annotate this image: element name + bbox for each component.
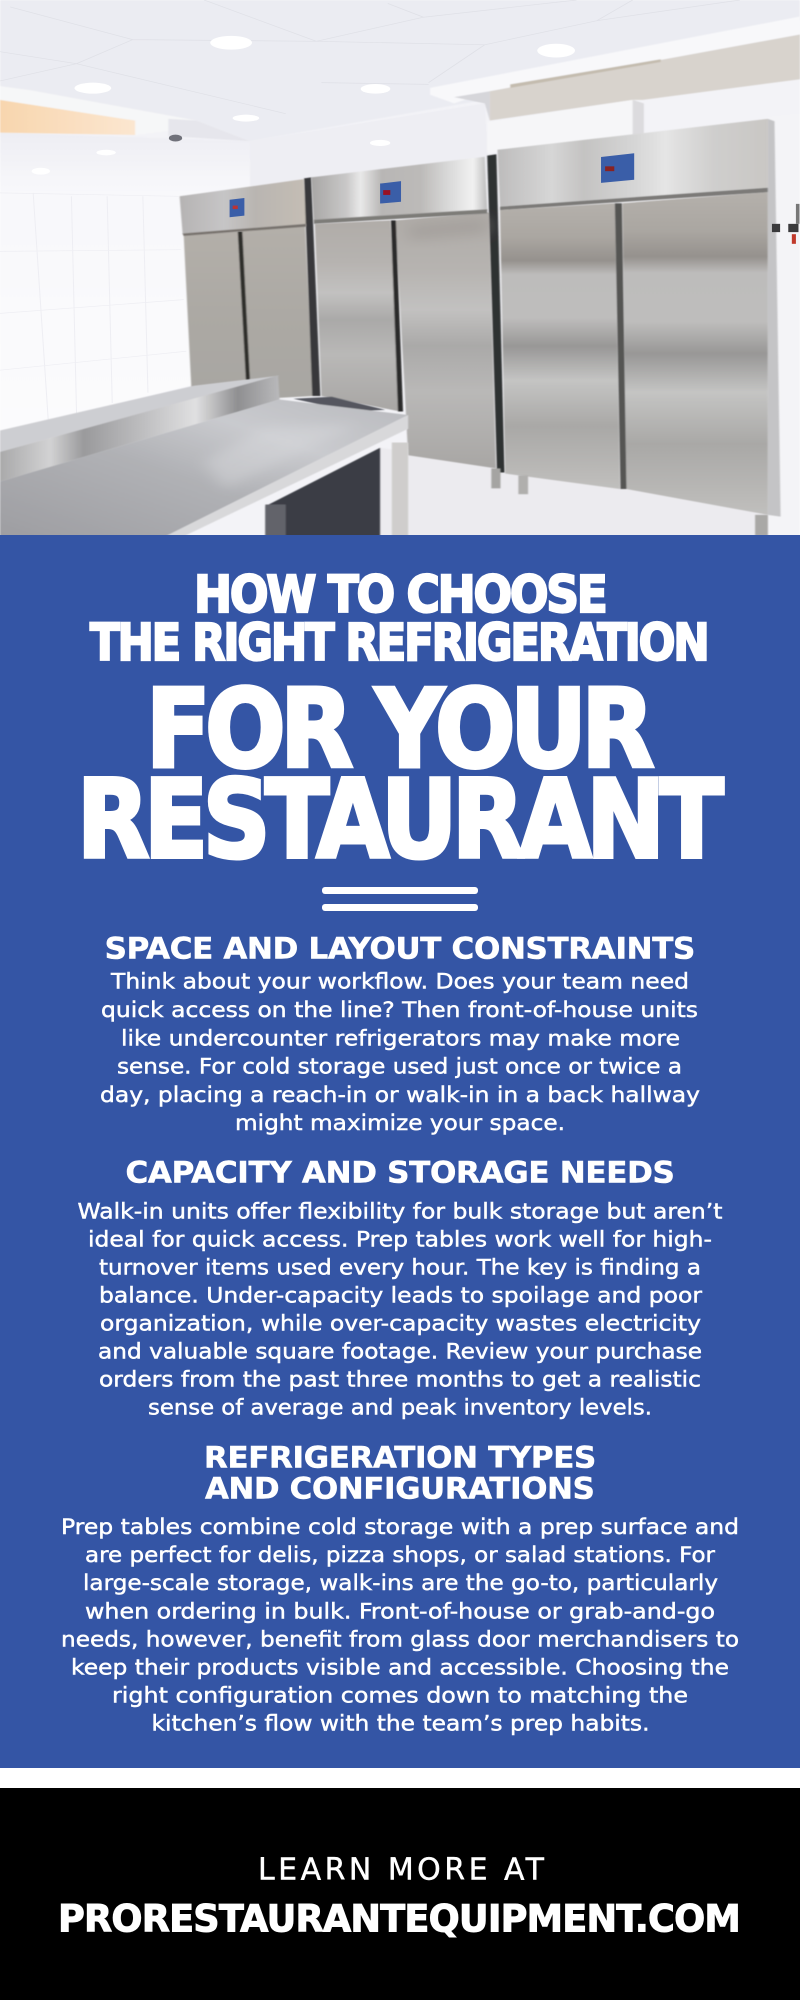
ceiling grid lines: [0, 0, 740, 114]
double line divider: [322, 887, 478, 911]
heading: space and layout constraints: SPACE AND LAYOUT CONSTRAINTS: [105, 931, 695, 965]
refrigerator 2: [311, 154, 505, 473]
text block: capacity and storage: ideal for quick access. Prep tables work well for high-: [88, 1228, 712, 1252]
panel: blue content area: [0, 535, 800, 1768]
text block: refrigeration types: kitchen’s flow with the team’s prep habits.: [152, 1711, 650, 1735]
text block: refrigeration types: Prep tables combine cold storage with a prep surface and: [61, 1515, 739, 1539]
prep table with backsplash: [0, 375, 408, 540]
footer: call to action: [0, 1788, 800, 2000]
text block: space and layout: day, placing a reach-in or walk-in in a back hallway: [100, 1083, 700, 1107]
text block: capacity and storage: turnover items used every hour. The key is finding a: [99, 1256, 701, 1280]
text block: capacity and storage: Walk-in units offer flexibility for bulk storage but aren’t: [78, 1199, 722, 1223]
text block: capacity and storage: and valuable square footage. Review your purchase: [98, 1340, 702, 1364]
footer label: LEARN MORE AT: [258, 1852, 545, 1887]
text block: space and layout: sense. For cold storage used just once or twice a: [117, 1055, 682, 1079]
text block: capacity and storage: balance. Under-capacity leads to spoilage and poor: [99, 1284, 702, 1308]
footer website: PRORESTAURANTEQUIPMENT.COM: [58, 1898, 740, 1941]
heading: refrigeration types and configurations: [204, 1440, 596, 1505]
text block: refrigeration types: needs, however, benefit from glass door merchandisers to: [61, 1627, 739, 1651]
text block: refrigeration types: [61, 1515, 739, 1735]
title: HOW TO CHOOSE: [194, 565, 606, 624]
refrigerator control labels: [230, 153, 634, 217]
title: [77, 565, 723, 883]
security camera: [169, 135, 182, 142]
text block: space and layout: like undercounter refrigerators may make more: [121, 1026, 680, 1050]
text block: refrigeration types: when ordering in bulk. Front-of-house or grab-and-go: [85, 1599, 715, 1623]
text block: refrigeration types: large-scale storage, walk-ins are the go-to, particularly: [83, 1571, 718, 1595]
room: ceiling, walls and floor: [0, 0, 800, 540]
heading: capacity and storage needs: CAPACITY AND STORAGE NEEDS: [126, 1156, 674, 1190]
ceiling soffit and hood recess: [430, 17, 800, 153]
text block: refrigeration types: keep their products visible and accessible. Choosing the: [71, 1655, 729, 1679]
text block: capacity and storage: orders from the past three months to get a realistic: [99, 1368, 701, 1392]
refrigerator 3: [183, 119, 781, 517]
wall tile lines: [0, 193, 186, 424]
text block: space and layout: might maximize your space.: [235, 1111, 565, 1135]
title: THE RIGHT REFRIGERATION: [90, 613, 708, 672]
heading: refrigeration types and configurations: AND CONFIGURATIONS: [205, 1471, 594, 1505]
ceiling lights and reflections: [32, 36, 575, 175]
text block: refrigeration types: are perfect for delis, pizza shops, or salad stations. For: [85, 1543, 715, 1567]
title: FOR YOUR: [146, 668, 653, 792]
heading: refrigeration types and configurations: REFRIGERATION TYPES: [204, 1440, 596, 1474]
text block: capacity and storage: [78, 1199, 722, 1420]
text block: capacity and storage: sense of average and peak inventory levels.: [148, 1396, 652, 1420]
text block: refrigeration types: right configuration comes down to matching the: [112, 1683, 688, 1707]
text block: capacity and storage: organization, while over-capacity wastes electricity: [100, 1312, 701, 1336]
text block: space and layout: quick access on the line? Then front-of-house units: [101, 998, 698, 1022]
refrigerator legs: [491, 468, 768, 536]
knife rack on right wall: [772, 204, 799, 244]
text block: space and layout: Think about your workflow. Does your team need: [110, 970, 689, 994]
text block: space and layout: [100, 970, 700, 1135]
photo: stainless steel refrigerators in a commercial kitchen: [0, 0, 800, 535]
refrigerator 1: [180, 177, 320, 399]
title: RESTAURANT: [77, 758, 723, 883]
